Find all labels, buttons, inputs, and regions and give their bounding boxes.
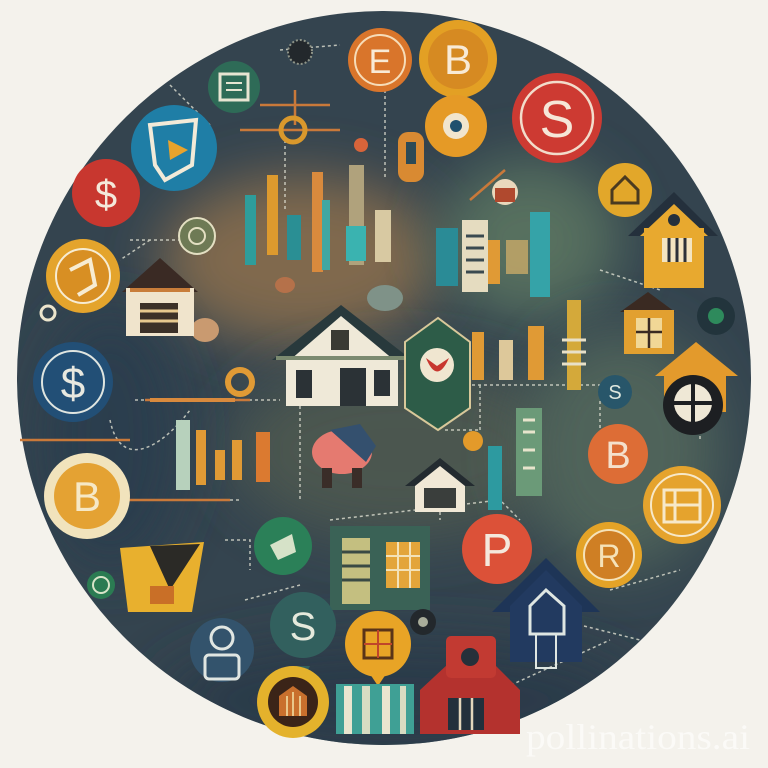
coin: orange top bbox=[348, 28, 412, 92]
house icon: right with dark circle bbox=[655, 342, 738, 435]
coin: blue bbox=[131, 105, 217, 191]
small coin: pale bbox=[41, 306, 55, 320]
coin: dark green box bbox=[208, 61, 260, 113]
pin: teal bbox=[270, 592, 336, 680]
small coin: teal centre right: S bbox=[608, 382, 622, 404]
coin: orange right: B bbox=[605, 435, 631, 477]
coin: yellow top bbox=[419, 20, 497, 98]
bar panel: bottom bbox=[336, 684, 414, 734]
coin: cream bitcoin: B bbox=[73, 473, 101, 520]
small coin: teal centre right bbox=[598, 375, 632, 409]
house: left bbox=[122, 258, 198, 336]
coin: red top-left bbox=[72, 159, 140, 227]
coin: red top-left: $ bbox=[95, 173, 117, 217]
orange connector lines bbox=[20, 90, 505, 500]
box icon: lower left bbox=[120, 542, 204, 612]
coin: yellow top: B bbox=[444, 36, 472, 83]
coin: red lower bbox=[462, 514, 532, 584]
bar chart: upper centre-right bbox=[436, 212, 550, 297]
house: small orange right bbox=[620, 292, 675, 354]
small round icons: right bbox=[697, 297, 735, 335]
shield badge bbox=[405, 318, 470, 430]
house: red bottom bbox=[420, 636, 520, 734]
small coin: green bbox=[87, 571, 115, 599]
coin: cream bitcoin bbox=[44, 453, 130, 539]
coin: orange right bbox=[588, 424, 648, 484]
coin: large red: S bbox=[540, 91, 574, 149]
network lines bbox=[110, 45, 700, 690]
key icon bbox=[150, 370, 252, 402]
house: main centre bbox=[272, 305, 412, 406]
coin: yellow lower right: R bbox=[597, 538, 621, 574]
coin: orange top: E bbox=[369, 43, 391, 81]
coin: yellow lower right bbox=[576, 522, 642, 588]
small dark dial bbox=[410, 609, 436, 635]
bar chart: right of centre bbox=[472, 300, 586, 390]
pin: teal: S bbox=[290, 605, 316, 649]
coin: green lower bbox=[254, 517, 312, 575]
watermark: pollinations.ai bbox=[526, 717, 750, 757]
coin: yellow bottom bbox=[257, 666, 329, 738]
house: blue lower right bbox=[492, 558, 600, 668]
pale node circle bbox=[179, 218, 215, 254]
small dark icon top bbox=[288, 40, 312, 64]
piggy bank bbox=[312, 424, 376, 488]
coin: blue left: $ bbox=[61, 359, 85, 408]
pin: yellow bbox=[345, 611, 411, 686]
cup icon bbox=[492, 179, 518, 205]
orange pendant bbox=[398, 132, 424, 182]
bar chart: lower left bbox=[176, 420, 270, 490]
tall green bar panel bbox=[463, 408, 542, 510]
coin: yellow right large bbox=[643, 466, 721, 544]
house: top right bbox=[628, 192, 718, 288]
pin: blue person bbox=[190, 618, 254, 682]
coin: yellow left bbox=[46, 239, 120, 313]
bar chart: upper centre-left bbox=[245, 165, 391, 272]
coin: red lower: P bbox=[482, 524, 512, 576]
building: centre lower bbox=[330, 526, 430, 610]
coin: orange with dark centre bbox=[425, 95, 487, 157]
house: small centre bbox=[405, 458, 475, 512]
tan blobs bbox=[191, 277, 403, 342]
coin: blue left bbox=[33, 342, 113, 422]
coin: large red bbox=[512, 73, 602, 163]
coin: yellow right bbox=[598, 163, 652, 217]
